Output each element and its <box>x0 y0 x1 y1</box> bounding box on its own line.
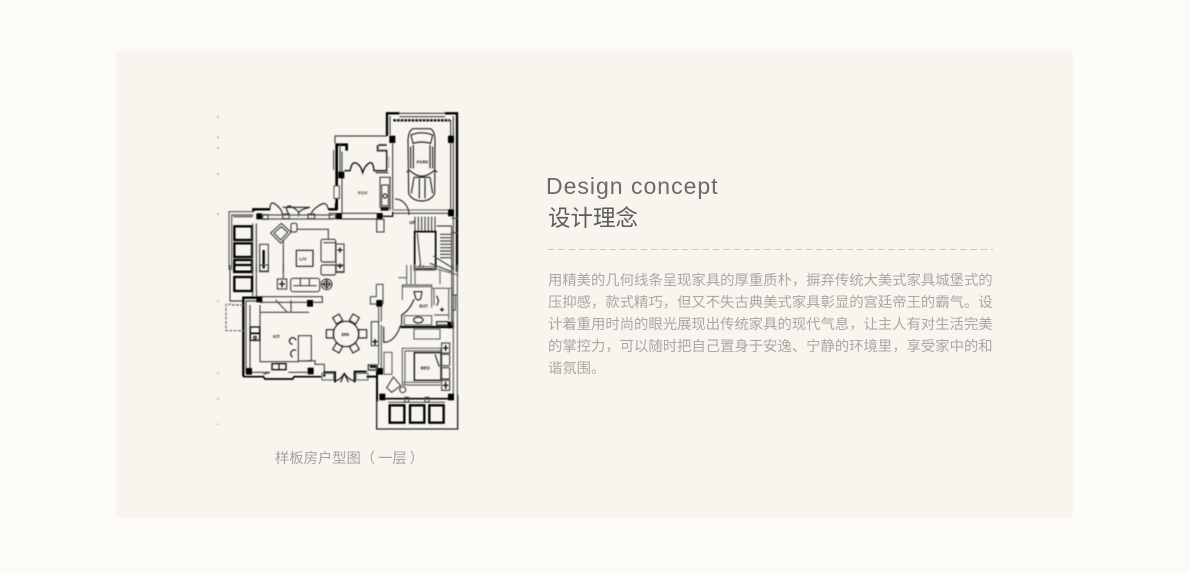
bathroom <box>401 285 454 339</box>
entry hall <box>334 136 393 232</box>
lower half of plan: kitchen, dining, bath, bedroom <box>217 263 458 429</box>
living room bay window <box>229 203 336 270</box>
panel: background card <box>116 51 1073 518</box>
heading: chinese: 设计理念 <box>548 206 638 231</box>
body text: 压抑感，款式精巧，但又不失古典美式家具彰显的宫廷帝王的霸气。设 <box>548 295 993 311</box>
bathroom: BAT <box>419 303 428 308</box>
stairs and right wall continuation <box>384 265 458 395</box>
body text: 的掌控力，可以随时把自己置身于安逸、宁静的环境里，享受家中的和 <box>548 339 993 355</box>
stairs: UP <box>409 220 415 225</box>
terrace with three windows <box>377 395 458 429</box>
body text: 谐氛围。 <box>548 361 605 377</box>
living room sofa set: LIV <box>299 256 307 261</box>
bedroom: BED <box>421 366 430 371</box>
icon: car: PARK <box>417 160 429 165</box>
front entrance door <box>322 365 377 382</box>
living room lower furniture <box>230 263 344 301</box>
caption: 样板房户型图（一层） <box>275 451 424 467</box>
living room windows <box>234 226 252 272</box>
heading: english: Design concept <box>546 173 719 199</box>
scale dots <box>217 301 219 425</box>
living room sofa set <box>233 217 344 272</box>
kitchen <box>226 296 324 379</box>
divider <box>548 248 993 250</box>
body text: 计着重用时尚的眼光展现出传统家具的现代气息，让主人有对生活完美 <box>548 317 993 333</box>
scale dots <box>217 116 219 215</box>
stairs <box>409 217 457 272</box>
dining table: DIN <box>342 332 349 337</box>
body text: 用精美的几何线条呈现家具的厚重质朴，摒弃传统大美式家具城堡式的 <box>548 273 993 289</box>
kitchen: KIT <box>273 334 280 339</box>
garage <box>378 113 457 272</box>
dining table <box>326 314 367 353</box>
upper half of plan: garage, entry and living room <box>217 113 457 272</box>
central partition wall <box>368 284 383 402</box>
icon: car <box>407 129 437 201</box>
body text <box>548 272 993 377</box>
bedroom <box>379 343 454 402</box>
entry hall: FOY <box>358 190 368 195</box>
